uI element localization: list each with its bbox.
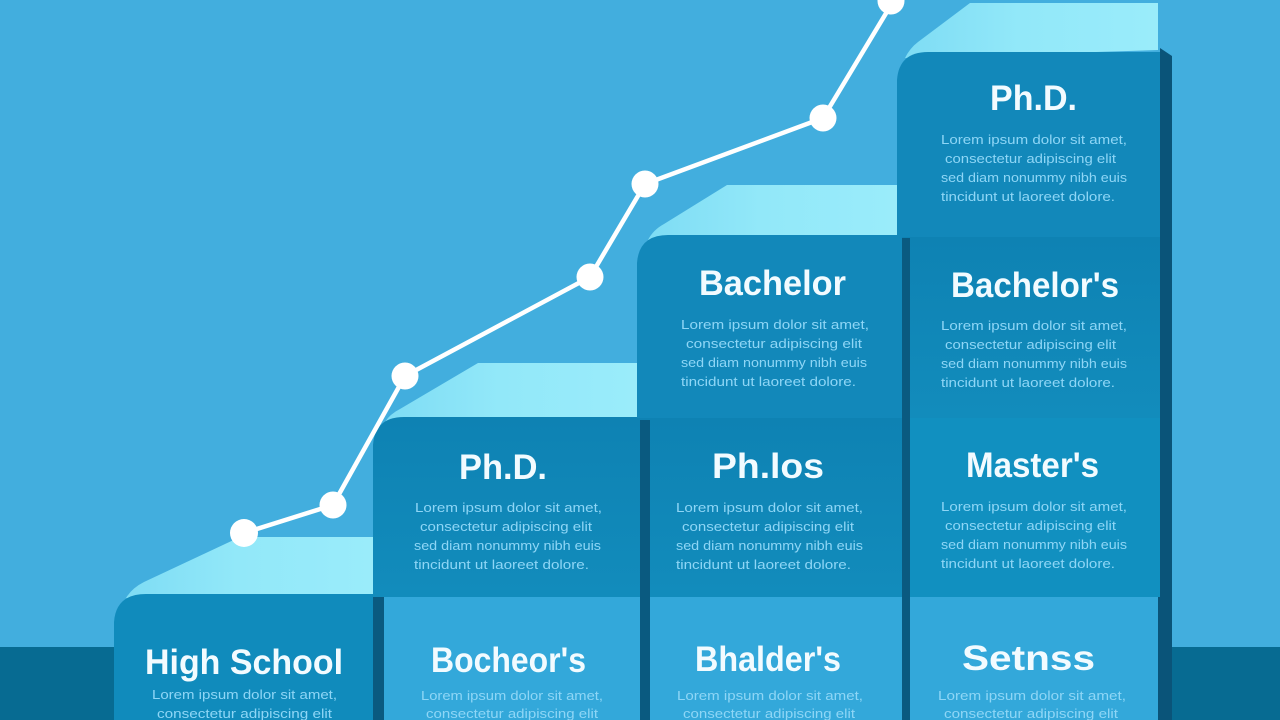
heading: Bachelor: Bachelor [699,264,846,303]
step 4 lower description [938,688,1126,720]
step 4 description: tincidunt ut laoreet dolore. [941,189,1115,204]
heading: Setnss: Setnss [962,639,1095,678]
step 4 description [941,132,1128,204]
step 2 description [414,500,602,572]
step 3: Bachelor, Ph.los and Bhalder's [637,185,902,720]
step 2 lower description [421,688,603,720]
floor band [0,647,1280,720]
heading: Bocheor's: Bocheor's [431,641,586,680]
trend line [244,5,891,533]
step 1: High School [114,537,373,720]
step 2 dark strip [373,597,384,720]
heading: Ph.los: Ph.los [712,447,824,486]
step 4 right shadow [1158,48,1172,720]
step 4 lower description: Lorem ipsum dolor sit amet, [938,688,1126,703]
step 3 description: tincidunt ut laoreet dolore. [681,374,856,389]
step 4 description: consectetur adipiscing elit [945,151,1116,166]
step 3 dark strip [640,420,650,720]
step 4 third description: sed diam nonummy nibh euis [941,537,1128,552]
step 3 description: sed diam nonummy nibh euis [681,355,868,370]
step 3 upper block [637,235,902,418]
step 3 description: Lorem ipsum dolor sit amet, [681,317,869,332]
step 3 middle description: Lorem ipsum dolor sit amet, [676,500,863,515]
step 2 description: sed diam nonummy nibh euis [414,538,602,553]
step 3 lower description: Lorem ipsum dolor sit amet, [677,688,863,703]
heading: High School: High School [145,643,343,682]
step 4 third description [941,499,1128,571]
step 4 second description: sed diam nonummy nibh euis [941,356,1128,371]
step 4 description: Lorem ipsum dolor sit amet, [941,132,1127,147]
step 2 lower block [384,597,640,720]
heading: Bachelor's: Bachelor's [951,266,1119,305]
step 4 third block [902,418,1160,597]
step 3 lower description [677,688,863,720]
step 3 lower block [650,597,902,720]
step 4 dark strip [902,238,910,720]
heading: Master's: Master's [966,446,1099,485]
step 4 top face [905,3,1158,58]
step 4 upper block [897,52,1160,237]
step 4 description: sed diam nonummy nibh euis [941,170,1128,185]
heading: Bhalder's: Bhalder's [695,640,841,679]
step 2 upper block [373,417,640,597]
step 4 lower block [910,597,1158,720]
step 1 description: Lorem ipsum dolor sit amet, [152,687,337,702]
step 4 third description: tincidunt ut laoreet dolore. [941,556,1115,571]
step 4 second description: tincidunt ut laoreet dolore. [941,375,1115,390]
step 2 description: tincidunt ut laoreet dolore. [414,557,589,572]
step 4: Ph.D., Bachelor's, Master's and Setnss [897,3,1172,720]
step 2 top face [385,363,637,422]
step 4 second description [941,318,1128,390]
step 1 description [152,687,337,720]
step 4 second description: Lorem ipsum dolor sit amet, [941,318,1127,333]
step 1 top face [126,537,373,598]
step 3 middle description: consectetur adipiscing elit [682,519,854,534]
step 4 third description: consectetur adipiscing elit [945,518,1116,533]
step 3 middle description: tincidunt ut laoreet dolore. [676,557,851,572]
step 4 second description: consectetur adipiscing elit [945,337,1116,352]
step 3 middle description: sed diam nonummy nibh euis [676,538,864,553]
step 2 lower description: Lorem ipsum dolor sit amet, [421,688,603,703]
step 4 second block [902,237,1160,418]
step 3 middle description [676,500,864,572]
step 2 description: Lorem ipsum dolor sit amet, [415,500,602,515]
rising line chart [230,0,904,547]
heading: Ph.D. top: Ph.D. [990,79,1077,118]
step 3 description [681,317,869,389]
step 3 description: consectetur adipiscing elit [686,336,862,351]
trend line markers [230,0,904,547]
step 2 description: consectetur adipiscing elit [420,519,592,534]
step 4 third description: Lorem ipsum dolor sit amet, [941,499,1127,514]
step 2: Ph.D. and Bachelor's [373,363,640,720]
step 1 block [114,594,373,720]
step 3 top face [648,185,897,240]
heading: Ph.D.: Ph.D. [459,448,547,487]
step 3 middle block [640,418,902,597]
